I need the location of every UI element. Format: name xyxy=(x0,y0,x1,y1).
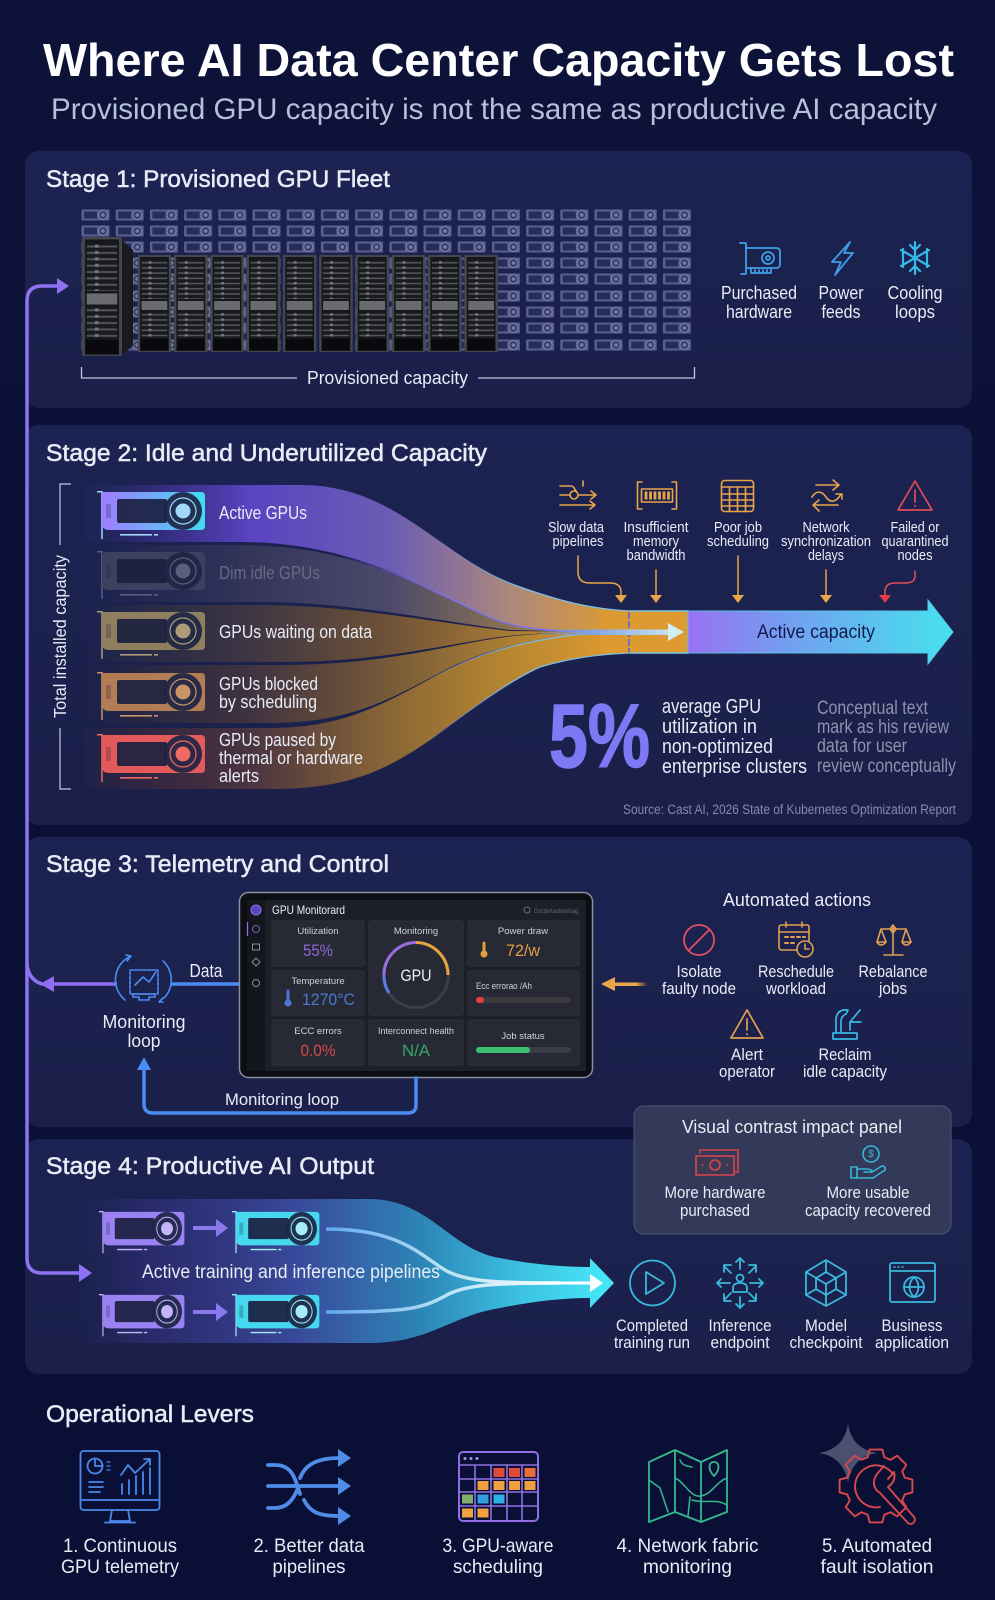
card: monitoring gauge: GPU xyxy=(400,967,432,985)
action: reschedule workload xyxy=(758,922,834,998)
lever 3: scheduling: scheduling xyxy=(453,1556,543,1578)
icon: map xyxy=(649,1450,727,1522)
small GPU grid xyxy=(82,210,691,350)
bottleneck: insufficient memory bandwidth xyxy=(624,482,688,603)
lever 1: telemetry: 1. Continuous xyxy=(63,1535,177,1557)
card: temperature xyxy=(272,971,364,1015)
bottleneck: failed or quarantined nodes: nodes xyxy=(898,548,932,564)
action: reschedule workload: workload xyxy=(765,979,826,998)
statistic description: enterprise clusters xyxy=(662,756,807,778)
provisioned capacity bracket: Provisioned capacity xyxy=(307,367,469,388)
output: completed training run: training run xyxy=(614,1333,690,1352)
gpu row: paused: alerts xyxy=(219,766,259,786)
card: ECC errors: 0.0% xyxy=(300,1041,336,1060)
icon: alert xyxy=(731,1010,763,1038)
impact heading: Visual contrast impact panel xyxy=(682,1117,902,1137)
icon: pipelines xyxy=(560,481,596,509)
output: completed training run: Completed xyxy=(616,1316,688,1335)
conceptual note: Conceptual text xyxy=(817,698,929,719)
output: completed training run xyxy=(614,1260,690,1352)
card: ECC errors xyxy=(272,1020,364,1065)
heading: stage 2: Stage 2: Idle and Underutilized Capacity xyxy=(46,440,488,467)
conceptual note: data for user xyxy=(817,736,908,757)
icon: cube xyxy=(806,1260,846,1306)
card: power draw: 72/w xyxy=(506,941,541,960)
impact: more hardware xyxy=(664,1150,766,1220)
icon: gear wrench xyxy=(840,1450,915,1524)
arrow xyxy=(193,1219,228,1237)
card: interconnect health: Interconnect health xyxy=(378,1026,454,1037)
action: rebalance jobs xyxy=(858,925,928,998)
statistic description xyxy=(662,696,807,778)
orange action arrow xyxy=(601,977,647,991)
output: business application: application xyxy=(875,1333,949,1352)
funnel trunk xyxy=(540,611,688,653)
gpu row: blocked: by scheduling xyxy=(219,692,317,712)
gpu row: waiting xyxy=(97,612,373,659)
icon: warning triangle xyxy=(898,481,932,510)
flow streams xyxy=(326,1229,603,1312)
gpu row: paused xyxy=(97,730,363,786)
action: alert operator: Alert xyxy=(731,1045,763,1064)
bottleneck: failed or quarantined nodes xyxy=(879,481,948,603)
total installed capacity bracket: Total installed capacity xyxy=(50,555,70,718)
icon: monitor xyxy=(80,1451,160,1522)
card: monitoring gauge: Monitoring xyxy=(394,926,438,937)
lever 1: telemetry xyxy=(61,1451,179,1578)
icon: shuffle xyxy=(268,1458,340,1516)
feedback arrow spine xyxy=(27,278,92,1282)
card: interconnect health: N/A xyxy=(402,1041,431,1060)
icon: GPU card xyxy=(740,243,780,274)
lever 2: pipelines: 2. Better data xyxy=(254,1535,365,1557)
lever 5: fault isolation: fault isolation xyxy=(820,1556,934,1578)
bottleneck: network synchronization delays: synchronization xyxy=(781,534,871,550)
gpu row bottom xyxy=(99,1295,319,1336)
lever 2: pipelines: pipelines xyxy=(272,1556,346,1578)
icon: lightning bolt xyxy=(832,242,853,275)
card: power draw: Power draw xyxy=(498,926,548,937)
arrow xyxy=(820,570,832,603)
action: isolate faulty node: faulty node xyxy=(662,979,736,998)
lever 4: network: 4. Network fabric xyxy=(616,1535,759,1557)
action: alert operator xyxy=(719,1010,775,1081)
icon: reclaim xyxy=(833,1010,861,1039)
gpu row: idle xyxy=(97,552,320,599)
title: Where AI Data Center Capacity Gets Lost xyxy=(43,34,954,86)
monitoring loop node xyxy=(102,955,186,1051)
icon: money xyxy=(696,1150,738,1175)
bottleneck: slow data pipelines xyxy=(548,481,627,603)
icon: ban xyxy=(684,925,714,955)
card: utilization: Utilization xyxy=(297,926,339,937)
item: power feeds: feeds xyxy=(822,302,860,322)
card: power draw xyxy=(468,921,579,966)
gpu row: blocked xyxy=(97,673,318,720)
output: inference endpoint: endpoint xyxy=(710,1333,770,1352)
active capacity arrow xyxy=(688,600,953,664)
icon: sparkle xyxy=(819,1424,877,1483)
output: inference endpoint: Inference xyxy=(708,1316,772,1335)
gpu row: paused: thermal or hardware xyxy=(219,748,363,768)
gpu row top xyxy=(99,1212,319,1253)
bottleneck: poor job scheduling xyxy=(707,480,769,603)
card: temperature: Temperature xyxy=(291,976,345,987)
data connector: Data xyxy=(190,961,223,981)
card: monitoring gauge xyxy=(369,921,463,1015)
provisioned capacity bracket xyxy=(82,367,694,388)
gpu row: active: Active GPUs xyxy=(219,503,307,523)
card: utilization: 55% xyxy=(303,941,333,960)
impact: more usable: capacity recovered xyxy=(805,1202,931,1220)
item: power feeds: Power xyxy=(818,283,864,303)
output: inference endpoint xyxy=(708,1258,772,1352)
statistic description: utilization in xyxy=(662,716,757,738)
item: purchased hardware: hardware xyxy=(726,302,792,322)
heading: stage 4: Stage 4: Productive AI Output xyxy=(46,1153,374,1180)
source note: Source: Cast AI, 2026 State of Kubernetes Optimization Report xyxy=(623,802,956,817)
lever 3: scheduling: 3. GPU-aware xyxy=(442,1535,554,1557)
heading: stage 1: Stage 1: Provisioned GPU Fleet xyxy=(46,166,390,193)
impact: more usable: More usable xyxy=(826,1184,910,1202)
arrow xyxy=(732,556,744,603)
conceptual note: mark as his review xyxy=(817,717,949,738)
icon: calendar clock xyxy=(779,922,813,957)
conceptual note xyxy=(817,698,956,777)
section: operational levers xyxy=(46,1401,934,1578)
card: ECC errors: ECC errors xyxy=(294,1026,342,1037)
impact: more usable: $ xyxy=(868,1149,874,1160)
item: cooling loops xyxy=(888,242,942,322)
item: cooling loops: Cooling xyxy=(888,283,942,303)
conceptual note: review conceptually xyxy=(817,756,956,777)
arrow xyxy=(879,571,915,603)
icon: monitoring loop xyxy=(115,955,171,1002)
lever 2: pipelines xyxy=(254,1449,365,1578)
item: purchased hardware xyxy=(721,243,797,322)
dashboard status: Gscdvrtardotoisag xyxy=(534,909,578,915)
heading: operational levers: Operational Levers xyxy=(46,1401,254,1428)
bottleneck: slow data pipelines: Slow data xyxy=(548,520,605,536)
icon: schedule grid xyxy=(722,480,754,512)
action: reschedule workload: Reschedule xyxy=(758,962,834,981)
statistic: 5%: 5% xyxy=(549,687,650,787)
bottleneck: network synchronization delays: Network xyxy=(802,520,850,536)
lever 4: network: monitoring xyxy=(643,1556,732,1578)
action: reclaim idle capacity: Reclaim xyxy=(818,1045,872,1064)
sankey flow bands xyxy=(83,485,630,789)
total installed capacity bracket xyxy=(50,484,71,789)
lever 5: fault isolation: 5. Automated xyxy=(822,1535,932,1557)
icon: inference xyxy=(717,1258,763,1308)
dashboard sidebar icons xyxy=(248,905,261,986)
output: model checkpoint: Model xyxy=(805,1316,847,1335)
pipeline label: Active training and inference pipelines xyxy=(142,1262,440,1283)
gpu row: idle: Dim idle GPUs xyxy=(219,563,320,583)
gpu row: waiting: GPUs waiting on data xyxy=(219,622,373,642)
arrow xyxy=(650,570,662,603)
lever 1: telemetry: GPU telemetry xyxy=(61,1556,179,1578)
monitoring loop node: Monitoring xyxy=(102,1012,186,1032)
dashboard xyxy=(240,892,592,1078)
bottleneck: poor job scheduling: Poor job xyxy=(714,520,762,536)
gpu row: active xyxy=(97,492,307,539)
action: rebalance jobs: Rebalance xyxy=(858,962,928,981)
card: interconnect health xyxy=(369,1020,463,1065)
impact: more hardware: purchased xyxy=(680,1202,750,1220)
arrow xyxy=(193,1303,228,1321)
icon: sync xyxy=(812,480,842,511)
icon: snowflake xyxy=(901,242,929,274)
icon: scales xyxy=(877,925,911,955)
action: alert operator: operator xyxy=(719,1062,775,1081)
statistic description: non-optimized xyxy=(662,736,773,758)
blue monitoring loop arrow: Monitoring loop xyxy=(225,1090,339,1109)
dashboard title: GPU Monitorard xyxy=(272,903,345,917)
data connector xyxy=(171,961,240,984)
card: ecc bar xyxy=(468,971,579,1015)
panel: stage 4 xyxy=(25,1139,972,1374)
arrow xyxy=(578,556,627,603)
server racks xyxy=(82,237,498,356)
active capacity arrow: Active capacity xyxy=(757,622,875,643)
blue monitoring loop arrow xyxy=(137,1057,416,1113)
gpu row: paused: GPUs paused by xyxy=(219,730,336,750)
action: rebalance jobs: jobs xyxy=(878,979,907,998)
icon: play xyxy=(630,1260,675,1306)
lever 4: network xyxy=(616,1450,759,1578)
statistic description: average GPU xyxy=(662,696,761,718)
panel: stage 2 xyxy=(25,425,972,825)
output: model checkpoint: checkpoint xyxy=(790,1333,863,1352)
bottleneck: network synchronization delays: delays xyxy=(808,548,844,564)
icon: scheduling grid xyxy=(459,1452,538,1521)
panel: stage 1 xyxy=(25,151,972,408)
heading: stage 3: Stage 3: Telemetry and Control xyxy=(46,851,389,878)
action: isolate faulty node: Isolate xyxy=(676,962,722,981)
item: power feeds xyxy=(818,242,864,322)
output: business application xyxy=(875,1263,949,1352)
icon: browser globe xyxy=(890,1263,935,1302)
bottleneck: insufficient memory bandwidth: memory xyxy=(633,534,680,550)
card: utilization xyxy=(272,921,364,966)
bottleneck: poor job scheduling: scheduling xyxy=(707,534,769,550)
bottleneck: slow data pipelines: pipelines xyxy=(552,534,604,550)
output: business application: Business xyxy=(882,1316,942,1335)
card: ecc bar: Ecc errorao /Ah xyxy=(476,981,532,992)
panel: stage 3 xyxy=(25,837,972,1127)
bottleneck: failed or quarantined nodes: Failed or xyxy=(890,520,940,536)
item: cooling loops: loops xyxy=(895,302,935,322)
lever 3: scheduling xyxy=(442,1452,554,1578)
impact: more usable xyxy=(805,1146,931,1220)
purple output arrow xyxy=(40,976,117,992)
subtitle: Provisioned GPU capacity is not the same as productive AI capacity xyxy=(51,93,937,126)
icon: memory xyxy=(638,482,676,509)
bottleneck: insufficient memory bandwidth: bandwidth xyxy=(626,548,686,564)
action: isolate faulty node xyxy=(662,925,736,998)
bottleneck: insufficient memory bandwidth: Insufficient xyxy=(624,520,688,536)
item: purchased hardware: Purchased xyxy=(721,283,797,303)
card: job status: Job status xyxy=(501,1031,545,1042)
action: reclaim idle capacity: idle capacity xyxy=(803,1062,887,1081)
lever 5: fault isolation xyxy=(819,1424,934,1578)
action: reclaim idle capacity xyxy=(803,1010,887,1081)
automated actions heading: Automated actions xyxy=(723,889,871,910)
flow band xyxy=(81,1199,614,1343)
impact: more hardware: More hardware xyxy=(664,1184,766,1202)
panel: visual contrast impact xyxy=(634,1106,951,1234)
bottleneck: network synchronization delays xyxy=(781,480,871,603)
icon: hand coin xyxy=(851,1146,885,1178)
monitoring loop node: loop xyxy=(128,1031,160,1051)
card: job status xyxy=(468,1020,579,1065)
dashboard status xyxy=(524,907,578,915)
gpu row: blocked: GPUs blocked xyxy=(219,674,318,694)
card: temperature: 1270°C xyxy=(302,990,355,1009)
bottleneck: failed or quarantined nodes: quarantined xyxy=(882,534,948,550)
output: model checkpoint xyxy=(790,1260,863,1352)
